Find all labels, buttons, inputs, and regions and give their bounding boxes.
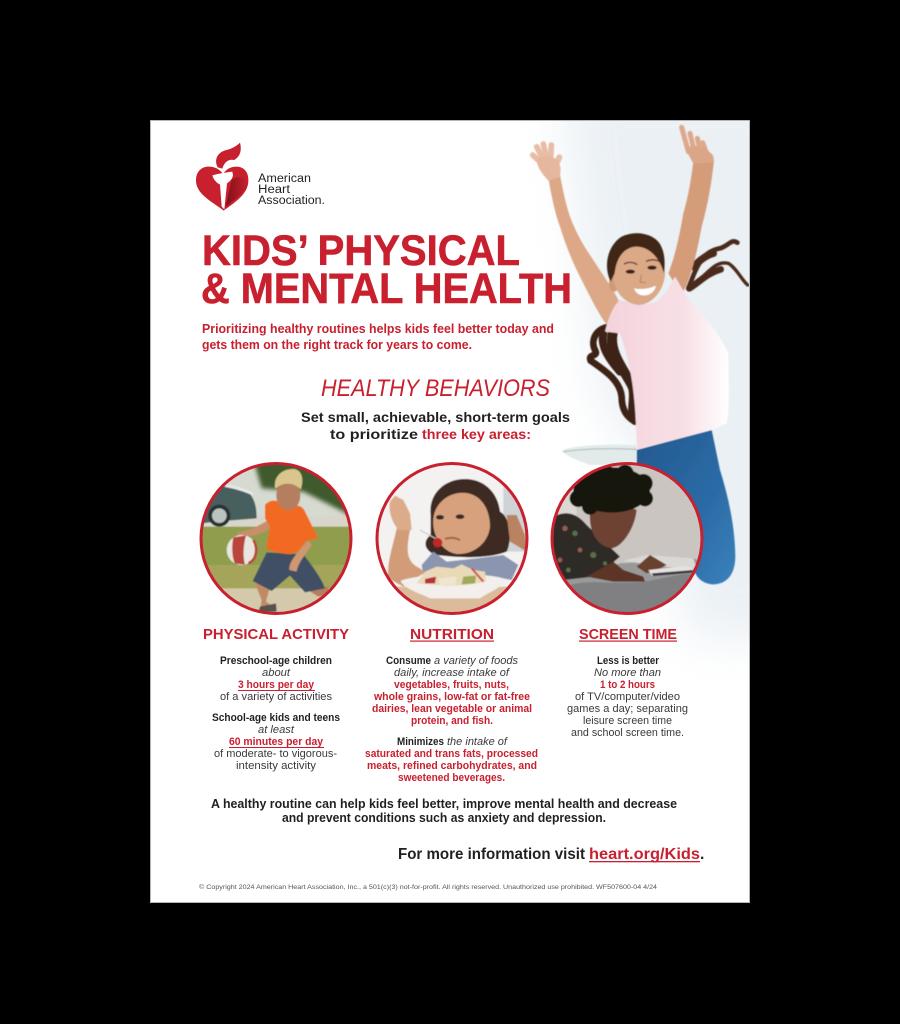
goals text: [301, 409, 570, 442]
column: physical activity: [203, 626, 349, 772]
goals text: to prioritize: [330, 426, 418, 442]
intro text: Prioritizing healthy routines helps kids feel better today and: [202, 321, 554, 336]
column: nutrition: [365, 626, 538, 784]
logo wordmark: Heart: [258, 184, 291, 196]
text: school-age guidance: at least: [258, 724, 295, 736]
text: preschool guidance: of a variety of activities: [220, 691, 332, 703]
closing statement: and prevent conditions such as anxiety and depression.: [282, 810, 606, 825]
text: consume: daily, increase intake of: [394, 667, 510, 679]
text: consume: dairies, lean vegetable or animal: [372, 703, 532, 715]
logo wordmark: [258, 173, 325, 207]
text: consume: Consume: [386, 655, 431, 667]
hair: [570, 464, 653, 515]
intro text: [202, 321, 554, 352]
heading: healthy behaviors: HEALTHY BEHAVIORS: [321, 375, 550, 402]
text: consume: vegetables, fruits, nuts,: [394, 679, 509, 691]
title: [201, 228, 572, 313]
left hand: [533, 144, 559, 167]
legs: [255, 583, 270, 607]
photo circle: boy using tablet: [550, 462, 707, 617]
text: preschool guidance: 3 hours per day: [238, 679, 315, 691]
arm left: [388, 528, 425, 587]
shorts: [253, 552, 325, 592]
left arm: [548, 175, 619, 331]
bed: [566, 558, 698, 586]
ear: [609, 275, 619, 292]
intro text: gets them on the right track for years to come.: [202, 337, 472, 352]
jeans: [637, 430, 735, 584]
shirt: [552, 513, 620, 580]
text: preschool guidance: Preschool-age children: [220, 655, 332, 667]
photo circle: girl eating fruit: [373, 460, 533, 620]
text: screen time guidance: [567, 655, 688, 739]
hair top: [607, 233, 665, 282]
goals text: Set small, achievable, short-term goals: [301, 409, 570, 425]
text: preschool guidance: [220, 655, 332, 703]
brows, eyes and smile: [624, 260, 659, 265]
heading: physical activity: PHYSICAL ACTIVITY: [203, 626, 349, 643]
text: school-age guidance: [212, 712, 340, 772]
text: minimizes: saturated and trans fats, processed: [365, 748, 538, 760]
text: screen time guidance: of TV/computer/video: [575, 691, 680, 703]
text: screen time guidance: 1 to 2 hours: [600, 679, 655, 691]
shirt: [605, 277, 729, 449]
call to action link: heart.org/Kids: [589, 846, 700, 863]
call to action link: [398, 846, 704, 863]
logo wordmark: Association.: [258, 195, 325, 207]
text: school-age guidance: intensity activity: [236, 760, 317, 772]
text: screen time guidance: No more than: [594, 667, 661, 679]
fork and strawberry: [420, 530, 438, 540]
text: preschool guidance: about: [262, 667, 291, 679]
heading: nutrition: NUTRITION: [410, 626, 494, 643]
face: [590, 505, 637, 548]
ball: [227, 535, 257, 565]
poster page: [150, 120, 750, 902]
hand: [390, 496, 412, 530]
text: screen time guidance: Less is better: [597, 655, 660, 667]
face: [433, 493, 490, 554]
right palm: [686, 146, 714, 163]
text: consume: protein, and fish.: [411, 715, 493, 727]
right hand: [682, 127, 707, 153]
text: consume: whole grains, low-fat or fat-free: [373, 691, 530, 703]
text: minimizes: meats, refined carbohydrates, and: [367, 760, 537, 772]
text: consume: a variety of foods: [434, 655, 518, 667]
text: minimizes: sweetened beverages.: [398, 772, 505, 784]
tablet: [648, 566, 693, 575]
arm: [587, 562, 645, 582]
call to action link: .: [700, 846, 704, 863]
plate: [401, 574, 505, 598]
heading: screen time: SCREEN TIME: [579, 626, 677, 643]
text: minimizes: the intake of: [447, 736, 508, 748]
hair: [426, 479, 510, 557]
fruit salad: [417, 564, 486, 586]
icon: heart and torch: [196, 143, 248, 211]
face: [613, 245, 665, 305]
text: consume: [372, 655, 532, 727]
photo: jumping girl: [529, 121, 749, 646]
shoe: [562, 445, 637, 465]
dress: [422, 552, 518, 580]
arms: [237, 520, 272, 537]
text: minimizes: Minimizes: [397, 736, 444, 748]
hair flying right: [688, 241, 748, 288]
logo wordmark: American: [258, 173, 311, 185]
title: KIDS’ PHYSICAL: [202, 228, 520, 275]
car: [200, 485, 257, 523]
column: screen time: [567, 626, 688, 739]
shirt: [265, 501, 318, 554]
title: & MENTAL HEALTH: [201, 266, 572, 313]
hand right: [507, 515, 527, 552]
head: [276, 481, 300, 510]
text: minimizes: [365, 736, 538, 784]
call to action link: For more information visit: [398, 846, 585, 863]
right arm: [668, 160, 714, 295]
logo: American Heart Association: [196, 143, 325, 211]
closing statement: [211, 796, 677, 825]
closing statement: A healthy routine can help kids feel better, improve mental health and decrease: [211, 796, 677, 811]
goals text: three key areas:: [422, 426, 531, 442]
hair ponytail left: [590, 327, 635, 422]
copyright footer: © Copyright 2024 American Heart Association, Inc., a 501(c)(3) not-for-profit. All rights reserved. Unauthorized use prohibited. WF507600-04 4/24: [199, 883, 657, 891]
text: school-age guidance: of moderate- to vigorous-: [214, 748, 337, 760]
text: screen time guidance: and school screen time.: [571, 727, 684, 739]
text: school-age guidance: School-age kids and teens: [212, 712, 340, 724]
photo circle: boy dribbling basketball: [197, 460, 357, 620]
text: school-age guidance: 60 minutes per day: [229, 736, 324, 748]
text: screen time guidance: games a day; separating: [567, 703, 688, 715]
left palm: [537, 156, 561, 181]
text: screen time guidance: leisure screen time: [583, 715, 672, 727]
